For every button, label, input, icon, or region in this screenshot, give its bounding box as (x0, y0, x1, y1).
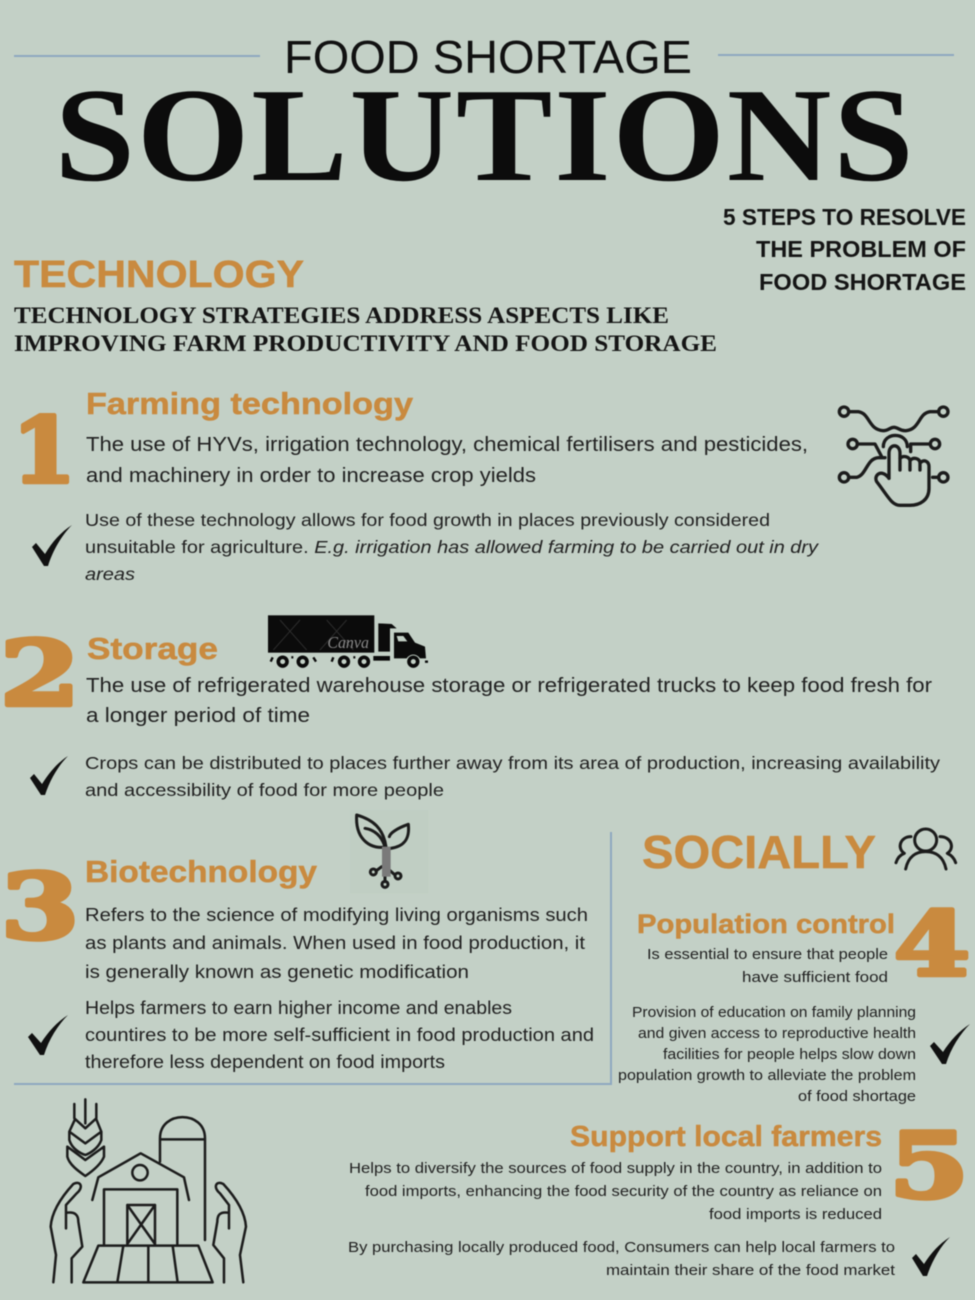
number 1: 1 (12, 398, 76, 504)
description: The use of HYVs, irrigation technology, chemical fertilisers and pesticides, (86, 434, 808, 456)
benefit text (618, 1005, 916, 1105)
description: Refers to the science of modifying living organisms such (85, 904, 588, 925)
heading: SOCIALLY (642, 826, 876, 878)
benefit text: countires to be more self-sufficient in food production and (85, 1025, 594, 1045)
field (83, 1246, 213, 1282)
number 3: 3 (1, 854, 79, 960)
heading: Support local farmers (570, 1121, 882, 1153)
heading: Biotechnology (85, 854, 318, 889)
title line: solutions: SOLUTIONS (54, 62, 915, 210)
benefit text: Helps farmers to earn higher income and enables (85, 998, 512, 1018)
subtitle: 5 steps (723, 204, 966, 295)
description (86, 434, 808, 487)
benefit text: therefore less dependent on food imports (85, 1052, 445, 1072)
icon: truck: Canva (327, 633, 369, 652)
number 2: 2 (0, 621, 80, 727)
silo (160, 1117, 205, 1240)
benefit text: unsuitable for agriculture. E.g. irrigation has allowed farming to be carried out in dry (85, 537, 819, 557)
description: food imports, enhancing the food security of the country as reliance on (365, 1183, 882, 1200)
icon: check mark (912, 1237, 950, 1276)
description: and machinery in order to increase crop yields (86, 465, 536, 487)
wheat (67, 1099, 104, 1176)
benefit text: population growth to alleviate the problem (618, 1068, 916, 1084)
benefit text: and given access to reproductive health (638, 1026, 916, 1042)
description (647, 946, 888, 986)
number 5: 5 (889, 1113, 969, 1219)
description (85, 904, 588, 982)
icon: hand touching network (839, 407, 948, 505)
benefit text (85, 510, 819, 584)
description: have sufficient food (742, 969, 888, 986)
benefit text: By purchasing locally produced food, Consumers can help local farmers to (348, 1239, 895, 1256)
section description: TECHNOLOGY STRATEGIES ADDRESS ASPECTS LIKE (14, 303, 669, 328)
benefit text: Use of these technology allows for food growth in places previously considered (85, 510, 770, 530)
icon: check mark (930, 1024, 970, 1064)
benefit text: of food shortage (798, 1089, 916, 1105)
section description (14, 303, 717, 356)
benefit text (85, 998, 594, 1072)
section heading: technology (14, 254, 717, 356)
description: a longer period of time (86, 705, 310, 727)
subtitle: 5 steps: FOOD SHORTAGE (759, 269, 966, 295)
illustration: barn, silo, wheat and hands (51, 1099, 246, 1282)
section description: IMPROVING FARM PRODUCTIVITY AND FOOD STORAGE (14, 331, 717, 356)
heading: Population control (637, 909, 895, 939)
icon: truck (268, 615, 428, 666)
description: as plants and animals. When used in food production, it (85, 932, 585, 953)
benefit text: and accessibility of food for more people (85, 780, 444, 800)
benefit text: facilities for people helps slow down (663, 1047, 916, 1063)
title line: food shortage: FOOD SHORTAGE (284, 31, 692, 83)
description: Is essential to ensure that people (647, 946, 888, 963)
description: The use of refrigerated warehouse storage or refrigerated trucks to keep food fresh for (86, 675, 932, 697)
right hand (213, 1183, 246, 1282)
step 5: support local farmers (348, 1113, 969, 1279)
heading: TECHNOLOGY (14, 254, 304, 296)
step 3: biotechnology (1, 810, 594, 1072)
left hand (51, 1183, 82, 1282)
title (54, 31, 915, 210)
benefit text: Crops can be distributed to places further away from its area of production, increasing availability (85, 753, 940, 773)
step 4: population control (618, 892, 970, 1105)
heading: Farming technology (86, 386, 414, 421)
benefit text (85, 753, 940, 800)
benefit text: areas (85, 564, 135, 584)
icon: check mark (28, 1015, 68, 1055)
benefit text: Provision of education on family planning (632, 1005, 916, 1021)
description (349, 1160, 882, 1223)
section heading: socially (642, 826, 956, 878)
icon: check mark (30, 756, 68, 795)
benefit text: maintain their share of the food market (606, 1262, 896, 1279)
number 4: 4 (894, 892, 970, 996)
subtitle: 5 steps: 5 STEPS TO RESOLVE (723, 204, 966, 230)
description: Helps to diversify the sources of food supply in the country, in addition to (349, 1160, 882, 1177)
step 2: storage (0, 615, 940, 800)
step 1: farming technology (12, 386, 948, 584)
description (86, 675, 932, 727)
subtitle: 5 steps: THE PROBLEM OF (756, 236, 966, 262)
description: is generally known as genetic modification (85, 961, 469, 982)
description: food imports is reduced (709, 1206, 882, 1223)
icon: plant with circuit roots (350, 810, 428, 893)
heading: Storage (87, 631, 218, 666)
icon: check mark (32, 525, 72, 566)
benefit text (348, 1239, 896, 1279)
icon: group of people (896, 829, 956, 869)
barn (92, 1153, 189, 1200)
